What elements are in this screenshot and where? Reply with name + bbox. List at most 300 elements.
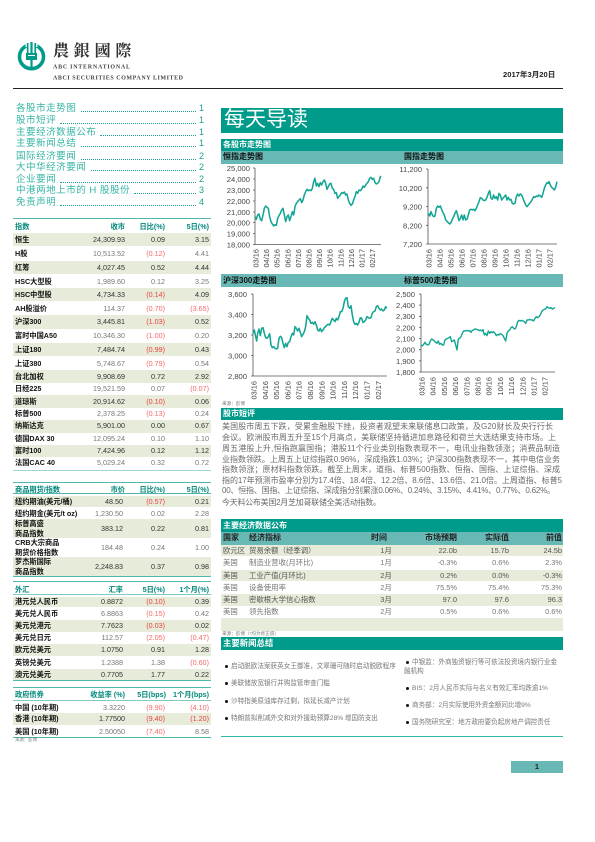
table: stock indices: 0.72 <box>151 372 165 380</box>
table: economic data: 2月 <box>380 607 392 616</box>
table: stock indices: 12,095.24 <box>93 434 125 442</box>
table: commodities: 商品指数 <box>15 528 44 538</box>
table: government bonds: 2.50050 <box>99 727 125 736</box>
table of contents: 3 <box>199 185 204 195</box>
table of contents <box>16 102 204 208</box>
news list: left column: 美联储放宽银行并购监管审查门槛 <box>231 680 330 687</box>
table: foreign exchange: (0.15) <box>146 609 165 618</box>
title banner <box>221 108 563 132</box>
chart: S&P 500: 04/16 <box>429 377 438 396</box>
chart: CSI 300: 02/17 <box>374 381 383 400</box>
chart: S&P 500: 2,000 <box>396 346 415 355</box>
table: commodities: 期货价格指数 <box>15 548 58 556</box>
chart: CSI 300: 08/16 <box>306 381 315 400</box>
table: economic data: 0.6% <box>492 607 509 616</box>
chart: Hang Seng Index: 11/16 <box>336 249 345 267</box>
table: stock indices: 富时100 <box>15 446 41 454</box>
chart: S&P 500: 2,100 <box>396 334 415 344</box>
table: stock indices: 3,445.81 <box>97 317 125 326</box>
table: stock indices: 红筹 <box>15 262 29 272</box>
table: foreign exchange: (0.03) <box>146 621 165 630</box>
table of contents: 2 <box>199 150 204 160</box>
table: economic data: 24.5b <box>544 546 562 555</box>
table: economic data: 1月 <box>380 546 392 555</box>
section heading: market commentary: 股市短评 <box>223 409 255 418</box>
chart: CSI 300: 3,600 <box>228 290 247 299</box>
chart: HSCEI: 04/16 <box>436 249 444 268</box>
table: stock indices: 日经225 <box>15 384 41 392</box>
table: foreign exchange: 0.7705 <box>101 670 123 678</box>
table of contents: 1 <box>199 126 204 136</box>
table: stock indices: 0.72 <box>195 458 209 467</box>
section heading: economic data <box>221 519 563 532</box>
chart: S&P 500: 2,300 <box>396 312 415 321</box>
chart: Hang Seng Index: 09/16 <box>315 249 324 268</box>
table: foreign exchange: 美元兑日元 <box>15 633 51 642</box>
table: economic data: 密歇根大学信心指数 <box>249 595 316 604</box>
table: economic data: 2月 <box>380 571 392 580</box>
table: stock indices: 5,901.00 <box>97 421 125 430</box>
table: government bonds: 美国 (10年期) <box>15 727 59 736</box>
section heading: index charts: 各股市走势图 <box>223 140 271 149</box>
table: foreign exchange <box>13 581 211 681</box>
table: economic data: 美国 <box>223 558 238 567</box>
table: foreign exchange: (2.05) <box>146 633 165 642</box>
table: foreign exchange: (0.60) <box>190 658 209 667</box>
table: economic data: 22.0b <box>438 546 457 555</box>
chart: Hang Seng Index: 06/16 <box>283 249 292 268</box>
chart: S&P 500: 09/16 <box>485 377 494 396</box>
chart: HSCEI: 11/16 <box>512 249 522 267</box>
market commentary text: 指的17年预测市盈率分别为17.4倍、18.4倍、12.2倍、8.6倍、13.6倍、21.0倍。上周道指、标普5 <box>222 475 563 485</box>
table: economic data: 领先指数 <box>249 607 279 616</box>
news list: left column: 启动脱欧法案获英女王御准，文翠珊可随时启动脱欧程序 <box>231 663 396 670</box>
header row <box>15 690 209 699</box>
table: economic data: 美国 <box>223 583 238 592</box>
market commentary text: 周五港股上升,恒指跑赢国指；港股11个行业类别指数表现不一，电讯业指数领涨；消费品制造 <box>222 443 560 453</box>
chart: CSI 300: 11/16 <box>340 381 349 399</box>
chart: S&P 500: 05/16 <box>440 377 449 396</box>
table: stock indices: 上证380 <box>15 358 41 368</box>
table: economic data: 美国 <box>223 571 238 580</box>
header row: 经济指标 <box>249 533 281 542</box>
table of contents: 2 <box>199 174 204 184</box>
chart: Hang Seng Index: 05/16 <box>273 249 282 268</box>
news list: right column <box>404 658 557 726</box>
company name: ABC INTERNATIONAL <box>53 64 130 70</box>
header row <box>15 222 209 230</box>
table: stock indices: 法国CAC 40 <box>15 458 55 467</box>
table: stock indices: 0.52 <box>195 317 209 326</box>
table: stock indices: 0.52 <box>151 262 165 272</box>
table: government bonds: 8.58 <box>195 727 209 736</box>
table: stock indices: 德国DAX 30 <box>15 434 55 442</box>
table: government bonds: 香港 (10年期) <box>15 714 59 723</box>
table: stock indices: (0.99) <box>146 344 165 354</box>
table of contents: 1 <box>199 138 204 148</box>
table: stock indices <box>13 218 211 471</box>
table: stock indices: (0.13) <box>146 409 165 418</box>
header row: 日比(%) <box>139 485 165 494</box>
header row: 5日(%) <box>143 584 165 594</box>
chart: CSI 300: 3,200 <box>228 331 247 340</box>
company name: 農銀國際 <box>53 43 136 60</box>
chart: CSI 300: 2,800 <box>228 372 247 381</box>
header row: 市场预期 <box>425 533 457 542</box>
header row: 汇率 <box>109 584 123 594</box>
table: stock indices: 10,513.52 <box>93 249 125 258</box>
table: economic data: 0.6% <box>492 558 509 567</box>
table: economic data: 欧元区 <box>223 546 245 555</box>
table: stock indices: (0.12) <box>146 249 165 258</box>
chart: Hang Seng Index: 01/17 <box>358 249 366 268</box>
table: stock indices: 上证180 <box>15 344 41 354</box>
table: foreign exchange: 1.0750 <box>101 645 123 654</box>
table of contents: 股市短评 <box>16 114 56 126</box>
table: stock indices: (0.79) <box>146 358 165 368</box>
table: stock indices: 2.92 <box>195 372 209 380</box>
company name: ABCI SECURITIES COMPANY LIMITED <box>53 76 184 82</box>
table: stock indices: HSC大型股 <box>15 276 52 286</box>
chart: S&P 500: 2,200 <box>396 323 415 332</box>
table: economic data: 设备使用率 <box>249 583 286 592</box>
table of contents: 4 <box>199 196 204 206</box>
table: commodities: 0.02 <box>151 509 165 518</box>
table: economic data: -0.3% <box>438 558 457 567</box>
header row: 1个月(bps) <box>173 690 209 699</box>
header rule <box>13 88 563 89</box>
table: stock indices: 0.20 <box>195 331 209 340</box>
table: economic data: 贸易余额（经季调） <box>249 546 316 555</box>
chart: CSI 300: 09/16 <box>317 381 326 400</box>
table: stock indices: (0.14) <box>146 290 165 298</box>
table: stock indices: 0.10 <box>151 434 165 442</box>
chart: S&P 500: 03/16 <box>418 377 426 396</box>
chart: HSCEI: 8,200 <box>403 221 422 230</box>
chart: HSCEI: 7,200 <box>403 240 422 249</box>
table of contents: 主要新闻总结 <box>16 138 76 149</box>
chart: HSCEI: 05/16 <box>446 249 456 268</box>
header row: 5日(%) <box>187 485 209 494</box>
table: stock indices: 3.25 <box>195 276 209 286</box>
market commentary text: 业指数领跌。上周五上证综指跌0.96%，深成指跌1.03%；沪深300指数表现不一，其中电信业务 <box>222 454 560 464</box>
table: commodities: 0.98 <box>195 562 209 571</box>
table: foreign exchange: 0.42 <box>195 609 209 618</box>
news list: right column: 中银监：外商独资银行等可依法投资境内银行业金 <box>412 659 557 666</box>
chart: S&P 500: 11/16 <box>507 377 516 395</box>
table: government bonds <box>13 687 211 738</box>
section heading: news summary: 主要新闻总结 <box>223 638 273 648</box>
table: stock indices: 19,521.59 <box>93 384 125 392</box>
chart: HSCEI: 10,200 <box>399 184 422 193</box>
table: stock indices: 4,027.45 <box>97 262 125 272</box>
table: economic data: 75.5% <box>436 583 457 592</box>
header row: 5日(bps) <box>137 690 166 699</box>
chart: HSCEI: 06/16 <box>458 249 466 268</box>
table: government bonds: (9.40) <box>146 714 165 723</box>
chart: HSCEI <box>399 165 558 268</box>
table: economic data: 0.6% <box>545 607 562 616</box>
market commentary text: 美国股市周五下跌，受累金融股下挫，投资者观望未来联储息口政策，及G20财长及央行行长 <box>222 421 553 431</box>
table: stock indices: 4.09 <box>195 290 209 298</box>
table: commodities: 0.22 <box>151 524 165 533</box>
chart: S&P 500: 02/17 <box>541 377 550 396</box>
section heading: market commentary <box>221 408 563 420</box>
chart: CSI 300: 12/16 <box>351 381 360 400</box>
table: foreign exchange: 0.8872 <box>101 596 123 606</box>
table: foreign exchange: 欧元兑美元 <box>15 645 51 654</box>
table: foreign exchange: 0.39 <box>195 596 209 606</box>
table: stock indices: 3.15 <box>195 235 209 244</box>
table: stock indices: (0.10) <box>146 396 165 406</box>
chart: HSCEI: 02/17 <box>546 249 554 268</box>
source note: left tables: 来源：彭博 <box>15 737 37 742</box>
news list: left column: 特朗普拟削减外交和对外援助预算28% 增国防支出 <box>231 714 378 722</box>
table: commodities: 0.21 <box>195 497 209 506</box>
chart: S&P 500: 08/16 <box>474 377 482 396</box>
table: foreign exchange: 英镑兑美元 <box>15 658 51 667</box>
header row: 时间 <box>371 533 387 542</box>
table: economic data: -0.3% <box>543 571 562 580</box>
market commentary text: 今天料公布美国2月芝加哥联储全美活动指数。 <box>222 497 381 507</box>
table: commodities: 0.24 <box>151 543 165 552</box>
table of contents: 大中华经济要闻 <box>16 162 86 173</box>
table: foreign exchange: 1.2388 <box>101 658 123 667</box>
table: foreign exchange: 6.8863 <box>101 609 123 618</box>
chart: Hang Seng Index: 23,000 <box>227 186 250 195</box>
chart: Hang Seng Index <box>227 164 382 268</box>
table: stock indices: 0.54 <box>195 358 209 368</box>
sub heading: HSI and HSCEI charts <box>221 151 563 164</box>
table: stock indices: 0.00 <box>151 421 165 430</box>
chart: CSI 300: 05/16 <box>272 381 281 400</box>
header row: 前值 <box>546 533 562 542</box>
table: stock indices: 0.24 <box>195 409 209 418</box>
header row: 1个月(%) <box>179 584 209 594</box>
table: commodities: 2.28 <box>195 509 209 518</box>
table: economic data: 15.7b <box>490 546 509 555</box>
table: stock indices: 0.12 <box>151 276 165 286</box>
table: foreign exchange: 0.91 <box>151 645 165 654</box>
header row: 指数 <box>15 222 29 230</box>
table of contents: 1 <box>199 102 204 112</box>
table: stock indices: 10,346.30 <box>93 331 125 340</box>
table: commodities <box>13 482 211 577</box>
chart: CSI 300: 04/16 <box>261 381 270 400</box>
table: foreign exchange: (0.47) <box>190 633 209 642</box>
table: economic data: 美国 <box>223 595 238 604</box>
table: stock indices: (0.07) <box>190 384 209 392</box>
table: foreign exchange: 美元兑人民币 <box>15 609 58 618</box>
section heading: news summary <box>221 637 563 650</box>
table: stock indices: AH股溢价 <box>15 304 47 313</box>
table: government bonds: (9.90) <box>146 703 165 712</box>
table: foreign exchange: 1.28 <box>195 645 209 654</box>
table: foreign exchange: 澳元兑美元 <box>15 670 51 678</box>
chart: S&P 500: 06/16 <box>451 377 460 396</box>
table: stock indices: 0.09 <box>151 235 165 244</box>
chart: S&P 500: 2,500 <box>396 290 415 299</box>
table: foreign exchange: 112.57 <box>102 633 123 642</box>
table: commodities: 1,230.50 <box>95 509 123 518</box>
news list: right column: 国务院研究室：地方政府要负起房地产调控责任 <box>412 719 550 726</box>
company name <box>53 42 184 82</box>
chart: Hang Seng Index: 08/16 <box>304 249 314 268</box>
chart: S&P 500: 01/17 <box>530 377 538 396</box>
market commentary text: 指数领涨；原材料指数领跌。截至上周末，道指、标普500指数、恒指、国指、上证综指、深成 <box>222 464 560 474</box>
table: stock indices: 4.44 <box>195 262 209 272</box>
chart: HSCEI: 03/16 <box>424 249 434 268</box>
table: economic data: 1月 <box>380 558 392 567</box>
sub heading: CSI300 and S&P500 charts: 沪深300走势图 <box>223 276 276 285</box>
table: economic data: 2.3% <box>545 558 562 567</box>
table: foreign exchange: 1.77 <box>151 670 165 678</box>
section heading: economic data: 主要经济数据公布 <box>223 521 287 530</box>
table: foreign exchange: 港元兑人民币 <box>15 596 58 606</box>
table: stock indices: 7,484.74 <box>97 344 125 354</box>
table: foreign exchange: 7.7623 <box>101 621 123 630</box>
table: economic data: 96.3 <box>548 595 562 604</box>
table: economic data: 97.0 <box>443 595 457 604</box>
source note: economic data: 来源：彭博（*均为修正值） <box>222 630 279 636</box>
table: stock indices: (1.00) <box>146 331 165 340</box>
table of contents: 主要经济数据公布 <box>16 126 96 138</box>
table: economic data: 3月 <box>380 595 392 604</box>
table: stock indices: 1.10 <box>195 434 209 442</box>
table: government bonds: (4.10) <box>190 703 209 712</box>
table: commodities: CRB大宗商品 <box>15 538 59 547</box>
table: stock indices: 7,424.96 <box>97 446 125 454</box>
chart: Hang Seng Index: 12/16 <box>347 249 356 268</box>
header row: 收市 <box>111 222 125 230</box>
table: government bonds: 3.3220 <box>103 703 125 712</box>
table: economic data: 2月 <box>380 583 392 592</box>
table: stock indices: 1,989.60 <box>97 276 125 286</box>
table: foreign exchange: 美元兑港元 <box>15 621 51 630</box>
section heading: index charts <box>221 139 563 150</box>
table: economic data: 工业产值(月环比) <box>249 571 306 580</box>
sub heading: CSI300 and S&P500 charts: 标普500走势图 <box>404 276 457 285</box>
table: commodities: 纽约期油(美元/桶) <box>15 497 72 506</box>
chart: HSCEI: 10/16 <box>502 249 510 268</box>
table: stock indices: 4,734.33 <box>97 290 125 298</box>
market commentary text: 会议。欧洲股市周五升至15个月高点，美联储坚持循进加息路径和荷兰大选结果支持市场。上 <box>222 432 556 442</box>
chart: Hang Seng Index: 03/16 <box>252 249 260 268</box>
table: commodities: 2,248.83 <box>95 562 123 571</box>
table: stock indices: 0.32 <box>151 458 165 467</box>
chart: HSCEI: 11,200 <box>399 165 422 174</box>
table: stock indices: HSC中型股 <box>15 290 52 298</box>
table: economic data: 0.2% <box>440 571 457 580</box>
table: stock indices: 2,378.25 <box>97 409 125 418</box>
header row <box>15 485 209 494</box>
table: stock indices: 0.07 <box>151 384 165 392</box>
table: government bonds: 中国 (10年期) <box>15 703 59 712</box>
news list: left column <box>225 662 396 722</box>
chart: S&P 500: 2,400 <box>396 301 415 310</box>
header row: 实际值 <box>485 533 509 542</box>
table: economic data: 75.3% <box>541 583 562 592</box>
news list: right column: BIS：2月人民币实际与名义有效汇率均跌逾1% <box>412 685 548 692</box>
table: commodities: 商品指数 <box>15 566 44 576</box>
chart: Hang Seng Index: 20,000 <box>227 218 250 228</box>
table of contents: 1 <box>199 114 204 124</box>
chart: HSCEI: 09/16 <box>490 249 500 268</box>
chart: S&P 500: 12/16 <box>518 377 527 396</box>
chart: Hang Seng Index: 22,000 <box>227 197 250 206</box>
table: foreign exchange: 0.22 <box>195 670 209 678</box>
table: economic data <box>221 532 563 631</box>
table: stock indices: (1.03) <box>146 317 165 326</box>
table: commodities: 标普高盛 <box>15 519 44 528</box>
table: stock indices: (0.70) <box>146 304 165 313</box>
market commentary text <box>222 421 563 507</box>
table: stock indices: 0.43 <box>195 344 209 354</box>
chart: S&P 500: 1,900 <box>396 357 415 366</box>
table: economic data: 75.4% <box>488 583 509 592</box>
chart: HSCEI: 07/16 <box>468 249 478 268</box>
header row: 5日(%) <box>187 222 209 230</box>
chart: Hang Seng Index: 02/17 <box>368 249 377 268</box>
header row <box>15 584 209 594</box>
page number: 1 <box>535 762 539 771</box>
table: commodities: 纽约期金(美元/t oz) <box>15 509 77 518</box>
table: government bonds: 1.77500 <box>99 714 125 723</box>
chart: HSCEI: 01/17 <box>534 249 544 268</box>
table: foreign exchange: 1.38 <box>151 658 165 667</box>
table: stock indices: 4.41 <box>195 249 209 258</box>
chart: HSCEI: 12/16 <box>524 249 532 268</box>
chart: Hang Seng Index: 25,000 <box>227 164 250 173</box>
table: stock indices: 纳斯达克 <box>15 421 44 430</box>
table: commodities: 罗杰斯国际 <box>15 557 51 566</box>
header row: 商品期货/指数 <box>15 485 60 494</box>
news bottom rule <box>221 736 563 737</box>
chart: S&P 500 <box>396 290 556 396</box>
table: stock indices: H股 <box>15 249 27 258</box>
table: stock indices: 恒生 <box>15 235 29 244</box>
chart: Hang Seng Index: 18,000 <box>227 240 250 250</box>
report date: 2017年3月20日 <box>503 70 555 79</box>
chart: CSI 300: 3,400 <box>228 310 247 320</box>
header row: 政府债券 <box>15 690 44 699</box>
table: commodities: 1.00 <box>195 543 209 552</box>
table: commodities: 48.50 <box>105 497 123 506</box>
chart: S&P 500: 10/16 <box>496 377 505 396</box>
chart: CSI 300: 03/16 <box>250 381 258 400</box>
news list: right column: 融机构 <box>404 668 424 674</box>
chart: CSI 300: 06/16 <box>283 381 292 400</box>
news list: right column: 商务部：2月实际使用外资金额同比增9% <box>412 702 531 709</box>
sub heading: CSI300 and S&P500 charts <box>221 274 563 287</box>
header row: 日比(%) <box>139 222 165 230</box>
chart: S&P 500: 1,800 <box>396 368 415 377</box>
table: stock indices: 富时中国A50 <box>15 331 57 340</box>
chart: CSI 300: 10/16 <box>329 381 338 400</box>
chart: HSCEI: 9,200 <box>403 202 422 212</box>
chart: CSI 300: 07/16 <box>295 381 304 400</box>
table: stock indices: 20,914.62 <box>93 396 125 406</box>
table: commodities: 0.81 <box>195 524 209 533</box>
table: stock indices: 24,309.93 <box>93 235 125 244</box>
table: economic data: 0.0% <box>492 571 509 580</box>
table: stock indices: 标普500 <box>15 409 41 418</box>
chart: Hang Seng Index: 10/16 <box>326 249 335 268</box>
table: stock indices: 5,748.67 <box>97 358 125 368</box>
source note: charts: 来源：彭博 <box>222 401 245 406</box>
table: government bonds: (1.20) <box>190 714 209 723</box>
chart: CSI 300 <box>228 290 388 400</box>
